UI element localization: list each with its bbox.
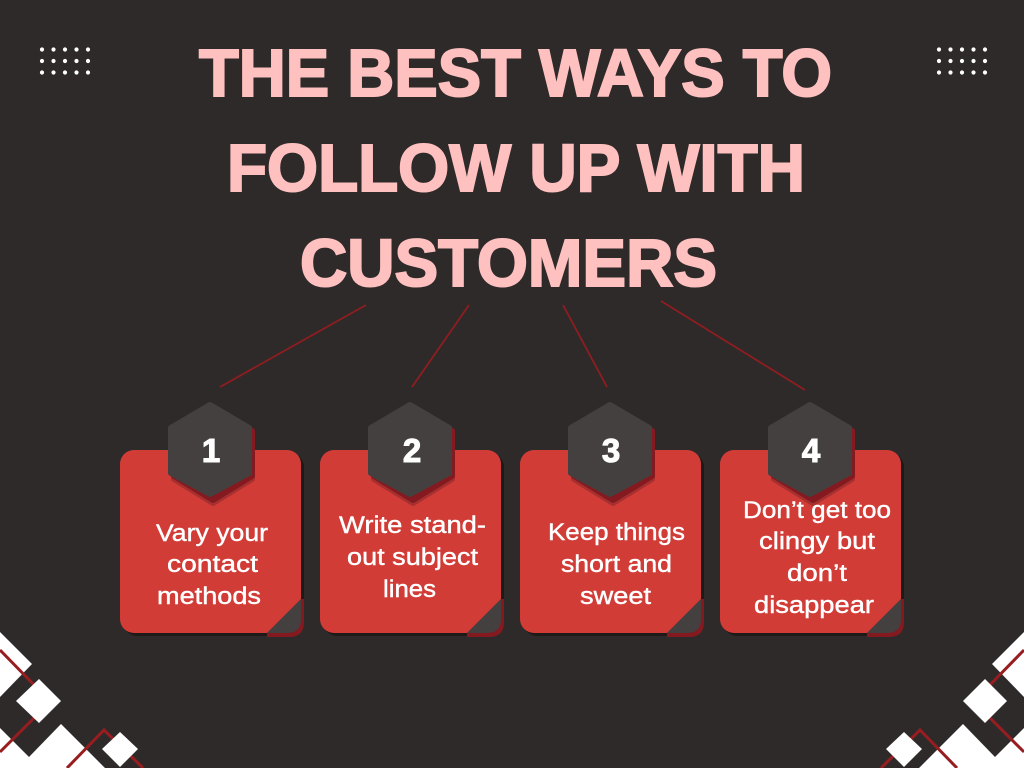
- card 1: methods: [157, 583, 261, 610]
- card 2: out subject: [347, 544, 478, 571]
- card 4: 4: [802, 432, 821, 469]
- card 1: Vary your: [156, 520, 268, 547]
- title: THE BEST WAYS TO: [199, 36, 832, 111]
- card 3: 3: [602, 432, 620, 469]
- card 3: [520, 405, 704, 637]
- card 4: disappear: [754, 592, 874, 619]
- card 2: lines: [383, 576, 436, 603]
- card 3: sweet: [580, 583, 651, 610]
- card 2: 2: [403, 432, 421, 469]
- card 3: Keep things: [548, 519, 685, 546]
- dot grid: top right: [937, 47, 987, 75]
- card 2: [320, 405, 504, 637]
- dot grid: top left: [40, 47, 90, 75]
- card 1: [120, 405, 304, 637]
- connector lines from title to cards: [220, 301, 805, 390]
- title: CUSTOMERS: [300, 226, 717, 301]
- corner decoration: bottom left: [0, 632, 143, 768]
- title: FOLLOW UP WITH: [227, 131, 805, 206]
- title: [199, 36, 832, 301]
- card 1: 1: [202, 432, 220, 469]
- corner decoration: bottom right: [881, 632, 1024, 768]
- card 4: Don’t get too: [743, 497, 891, 524]
- card 4: clingy but: [759, 528, 875, 555]
- card 4: don’t: [787, 560, 847, 587]
- card 3: short and: [561, 551, 672, 578]
- card 4: [720, 405, 904, 637]
- card 2: Write stand-: [339, 512, 486, 539]
- card 1: contact: [167, 551, 258, 578]
